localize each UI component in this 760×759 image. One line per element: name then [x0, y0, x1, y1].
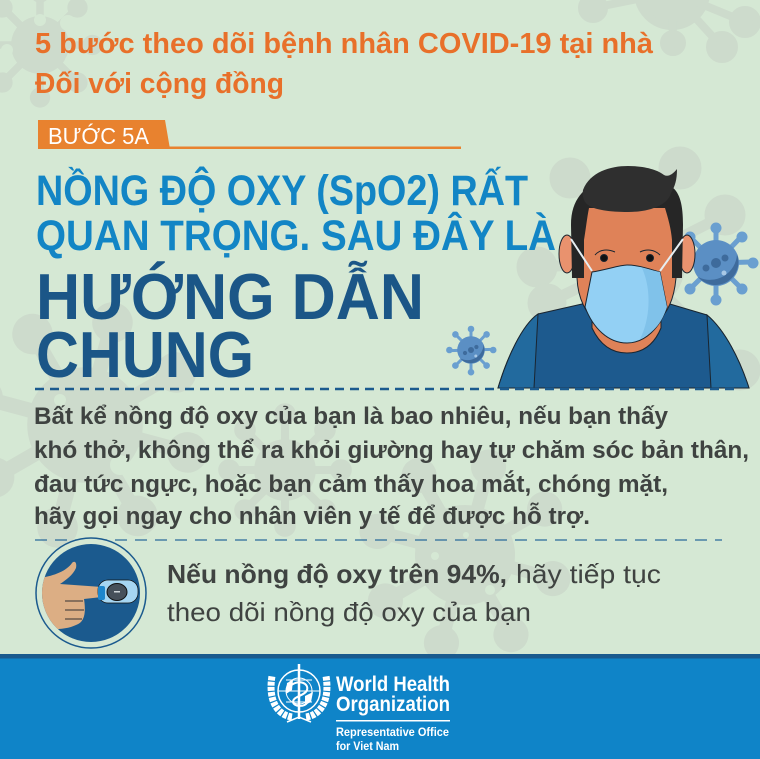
WHO logo wordmark: for Viet Nam	[336, 739, 399, 753]
step tag: BƯỚC 5A	[48, 123, 150, 149]
heading: main	[36, 260, 424, 391]
step tag	[38, 120, 461, 149]
WHO logo wordmark: Organization	[336, 693, 450, 716]
footer band	[0, 654, 760, 759]
body text: đau tức ngực, hoặc bạn cảm thấy hoa mắt, chóng mặt,	[34, 470, 668, 498]
heading: subtitle: QUAN TRỌNG. SAU ĐÂY LÀ	[36, 211, 556, 260]
heading: subtitle: NỒNG ĐỘ OXY (SpO2) RẤT	[36, 166, 528, 215]
body text: khó thở, không thể ra khỏi giường hay tự chăm sóc bản thân,	[34, 437, 749, 464]
note text: Nếu nồng độ oxy trên 94%,	[167, 559, 507, 589]
icon: pulse oximeter on finger	[36, 538, 146, 648]
body text: Bất kể nồng độ oxy của bạn là bao nhiêu, nếu bạn thấy	[34, 403, 669, 430]
title	[35, 28, 654, 100]
heading: main: CHUNG	[36, 318, 254, 391]
icon: large virus	[674, 222, 758, 306]
divider: bottom	[35, 539, 722, 541]
body text	[34, 403, 749, 530]
title: 5 bước theo dõi bệnh nhân COVID-19 tại nhà	[35, 28, 654, 60]
WHO logo wordmark: World Health	[336, 673, 450, 696]
body text: hãy gọi ngay cho nhân viên y tế để được hỗ trợ.	[34, 502, 590, 530]
note text: theo dõi nồng độ oxy của bạn	[167, 597, 531, 627]
WHO logo emblem	[271, 664, 327, 722]
WHO logo wordmark	[336, 673, 450, 753]
note text	[167, 559, 661, 627]
title: Đối với cộng đồng	[35, 68, 284, 100]
illustration: man wearing mask	[498, 166, 749, 388]
heading: main: HƯỚNG DẪN	[36, 260, 424, 333]
heading: subtitle	[36, 166, 556, 260]
note text: hãy tiếp tục	[516, 559, 661, 589]
icon: small virus	[446, 326, 496, 376]
WHO logo wordmark: Representative Office	[336, 725, 449, 739]
divider: top	[35, 388, 740, 390]
